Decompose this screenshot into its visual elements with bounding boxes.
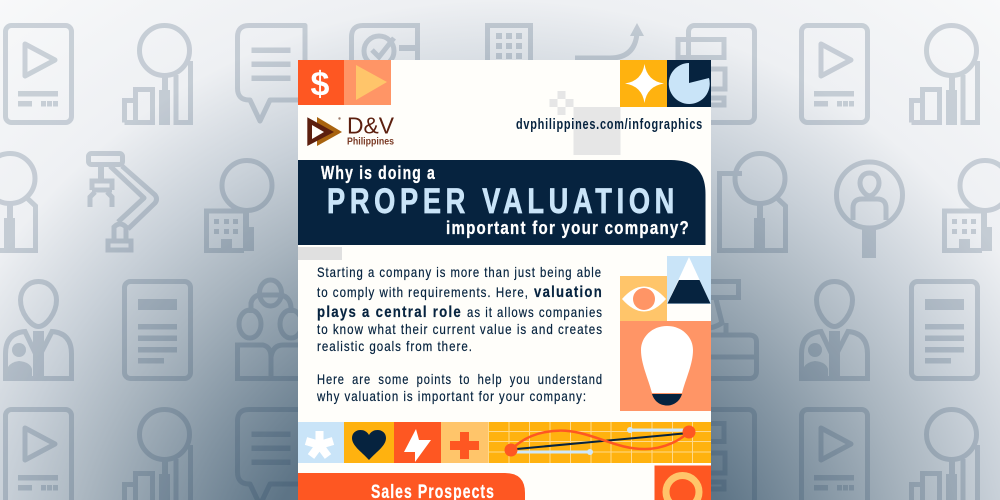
grey accent bar [298,247,342,260]
logo: D&V Philippines: Philippines [347,136,394,148]
infographic panel [298,60,711,500]
icon: ring block [654,466,711,500]
logo: D&V Philippines [307,112,395,148]
icon: lightning bolt [394,422,441,463]
icon: play block [344,60,391,105]
icon: dollar block: $ [311,66,330,104]
lead-in paragraph [316,371,603,404]
icon: dollar block [298,60,344,105]
title banner [298,160,706,245]
lead-in paragraph: Here are some points to help you understand [317,371,603,387]
intro paragraph: realistic goals from there. [317,338,473,354]
section banner: sales prospects [298,473,525,500]
title line: important for your company: important for your company? [446,218,690,238]
icon: heart [344,422,394,463]
lead-in paragraph: why valuation is important for your company: [316,388,587,404]
logo: D&V Philippines: D&V [347,112,395,138]
title line: why is doing a: Why is doing a [321,163,436,183]
website url: dvphilippines.com/infographics [516,117,703,133]
icon: pie chart block [667,60,711,107]
icon: mountain block [667,256,711,304]
intro paragraph: plays a central role [317,304,462,321]
intro paragraph: valuation [534,284,603,301]
icon: eye block [620,276,667,321]
line chart on grid [488,422,711,463]
intro paragraph: as it allows companies [467,304,603,320]
icon: asterisk [298,422,344,463]
intro paragraph [317,264,603,354]
intro paragraph: Starting a company is more than just being able [317,264,602,280]
decorative grey squares [550,91,620,155]
intro paragraph: to comply with requirements. Here, [317,284,529,300]
icon strip [298,422,711,463]
intro paragraph: to know what their current value is and creates [317,321,603,337]
icon: plus [441,422,488,463]
icon: sparkle block [620,60,667,107]
title line: proper valuation: PROPER VALUATION [327,182,679,221]
icon: light bulb block [620,321,711,411]
